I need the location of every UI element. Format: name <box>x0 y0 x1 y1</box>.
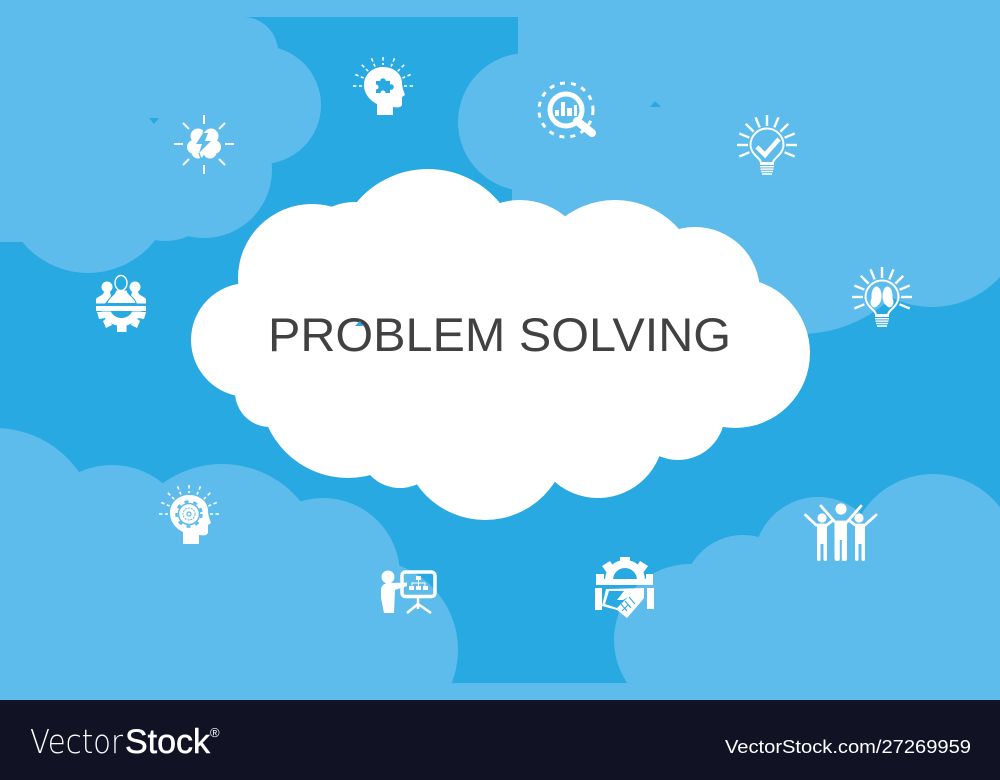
panel: top-left cloud <box>0 0 321 273</box>
icon: small triangle in title letter <box>355 321 363 326</box>
panel: top-right cloud <box>458 0 1000 334</box>
icon: magnifier with bar chart <box>539 83 593 137</box>
icon: small dark triangle right <box>650 101 661 107</box>
panel: bottom-right cloud <box>614 474 1000 716</box>
footer image id: VectorStock.com/27269959 <box>725 736 971 757</box>
icon: team on gear <box>96 276 146 332</box>
footer logo light word: Vector <box>30 722 123 761</box>
panel: footer bar <box>0 700 1000 780</box>
icon: head with gear <box>159 485 219 544</box>
icon: light bulb with check <box>737 115 797 175</box>
icon: three people cheering <box>806 503 876 561</box>
icon: small dark triangle left <box>149 118 159 124</box>
icon: light bulb with brain <box>852 267 912 327</box>
icon: head with puzzle piece <box>353 57 413 115</box>
panel: central white cloud <box>191 169 810 520</box>
icon: brain with lightning <box>174 115 234 174</box>
panel: bottom-left cloud <box>0 428 458 740</box>
icon: handshake under gear <box>595 557 654 618</box>
icon: presenter with chart board <box>381 570 435 613</box>
footer logo bold word: Stock <box>125 723 211 761</box>
registered mark: ® <box>210 725 220 740</box>
title: PROBLEM SOLVING <box>268 309 731 362</box>
